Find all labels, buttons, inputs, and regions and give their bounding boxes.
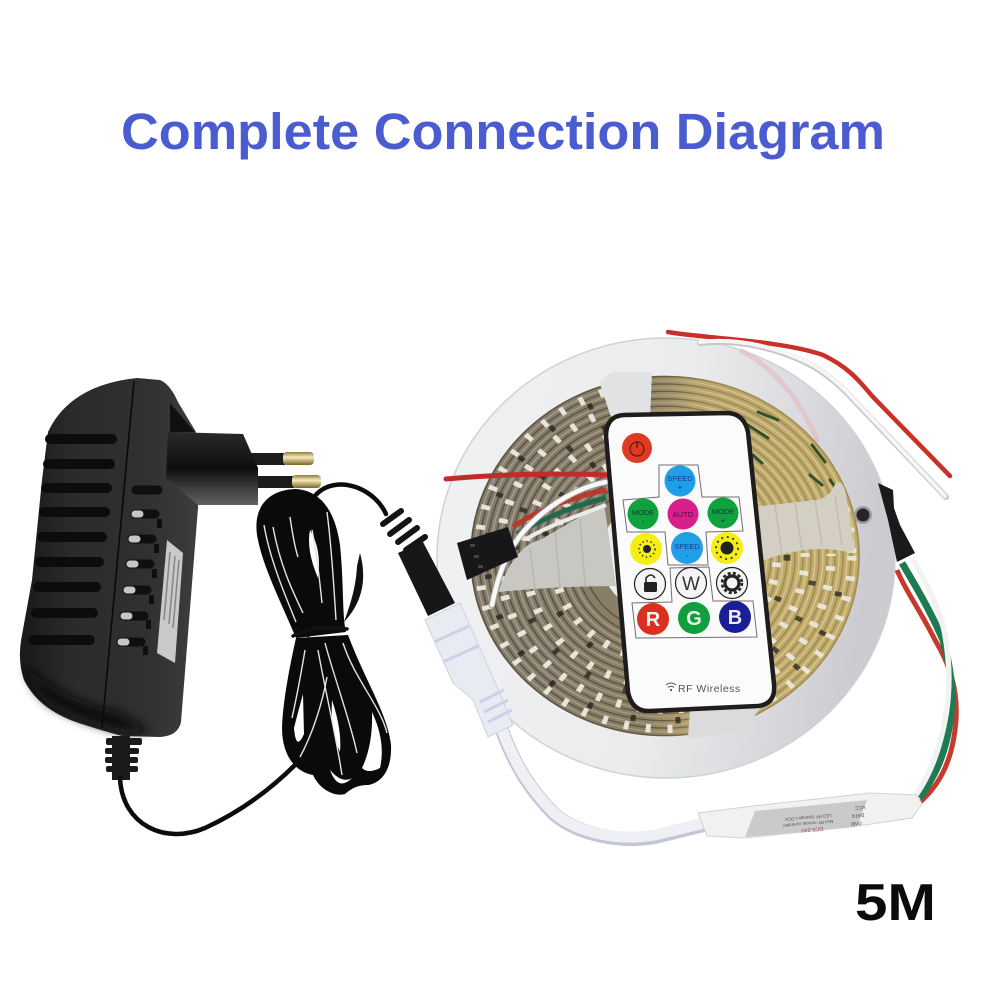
top facet [170, 403, 195, 432]
auto button [668, 498, 698, 530]
black connector [878, 483, 915, 562]
G button: G [686, 608, 702, 630]
B button: B [728, 607, 742, 629]
data wires [492, 482, 606, 605]
bottom spoke [688, 708, 760, 738]
G button [678, 602, 710, 634]
adapter body [20, 378, 198, 737]
remote body [606, 413, 774, 711]
auto button: AUTO [673, 510, 694, 519]
LED chips on the tape [478, 383, 852, 729]
gaps between cable loops [294, 530, 382, 783]
mode minus button [628, 498, 658, 530]
adapter plug base [166, 432, 258, 505]
lower shading [26, 665, 150, 732]
power leads: red and white [668, 332, 950, 497]
wifi icon [666, 683, 676, 691]
R button [637, 603, 669, 635]
DC jack connector [383, 511, 704, 839]
controller label: Mini RF remote controller [782, 819, 834, 828]
mode minus button: MODE [632, 508, 654, 517]
strain relief [105, 736, 142, 780]
rating label [157, 540, 183, 663]
power button [622, 433, 652, 463]
coiled black cable [120, 484, 391, 834]
controller label: LED RF Operate-LOCK [784, 813, 832, 822]
W button: W [682, 574, 700, 595]
speed minus button: - [686, 551, 689, 560]
mode plus button: + [721, 516, 726, 525]
upper coil bundle [256, 489, 346, 638]
LED strip reel [437, 338, 895, 778]
white cable from jack to controller [503, 732, 704, 839]
controller label: DATA [851, 811, 865, 819]
cable from coil to jack [300, 484, 386, 635]
controller label: GND [850, 820, 862, 827]
pink reflection on the disc [740, 350, 818, 442]
reel outer disc [437, 338, 895, 778]
mode plus button: MODE [712, 507, 734, 516]
mode plus button [708, 498, 738, 528]
cable tie [293, 628, 347, 636]
right connector and wires [878, 483, 956, 803]
button outlines [623, 465, 757, 638]
lock button [634, 568, 666, 600]
speed plus button: + [678, 483, 683, 492]
loose cable end [344, 553, 363, 622]
cable from adapter into coil [120, 764, 296, 834]
left connector and wires [446, 474, 606, 605]
controller label: VCC [854, 804, 866, 810]
controller label: DC5-24V [800, 825, 824, 833]
length label: 5M [855, 874, 936, 932]
mounting hole [854, 506, 872, 524]
inline controller [698, 793, 922, 838]
remote control [606, 413, 774, 711]
brightness down button [630, 533, 662, 565]
speed minus button: SPEED [674, 542, 700, 551]
W button [676, 568, 706, 598]
speed plus button: SPEED [667, 474, 693, 483]
coiled LED tape [471, 377, 859, 735]
side vents [121, 490, 162, 655]
top spoke [600, 372, 652, 420]
black jack body [398, 542, 455, 616]
cable highlights [264, 512, 387, 775]
B button [719, 601, 751, 633]
vent slots [33, 439, 112, 640]
RF wireless label: RF Wireless [678, 683, 741, 695]
black ribs [383, 511, 425, 550]
left spoke [498, 503, 616, 592]
lower coil bundle [282, 635, 391, 795]
power adapter [20, 378, 321, 780]
green marks on the upper right coil [748, 412, 836, 488]
R button: R [646, 609, 661, 631]
speed minus button [671, 532, 703, 564]
settings button [716, 568, 748, 598]
plug pins [240, 452, 321, 488]
white plug [425, 603, 513, 737]
white plug ribs [434, 626, 512, 722]
red wire [446, 474, 606, 479]
front seam [102, 381, 134, 728]
controller label [745, 800, 867, 837]
black plug [457, 527, 518, 580]
speed plus button [664, 466, 696, 496]
right spoke [753, 482, 855, 561]
label print [164, 552, 179, 628]
title: Complete Connection Diagram [121, 103, 885, 160]
mode minus button: - [642, 517, 645, 526]
controller housing [698, 793, 922, 838]
brightness up button [711, 532, 743, 564]
